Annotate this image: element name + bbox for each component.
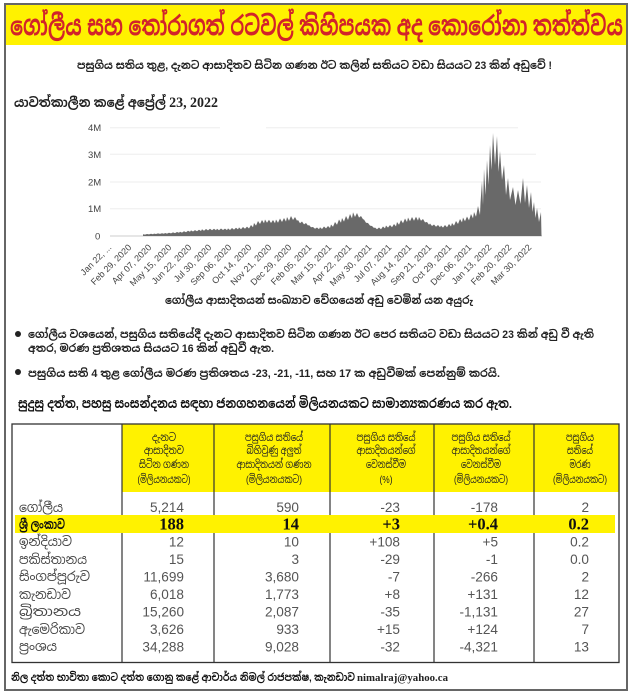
source credit: nimalraj@yahoo.ca: [357, 673, 449, 684]
daily case bars: [143, 133, 542, 236]
table numbers: +8: [384, 587, 400, 602]
x axis date labels: Oct 14, 2020: [210, 242, 253, 286]
table numbers: 0.2: [570, 534, 589, 550]
y axis labels: 2M: [88, 178, 101, 188]
table header: ආසාදිතව: [144, 445, 184, 457]
y axis labels: 1M: [88, 204, 101, 215]
table header: වෙනස්වීම: [366, 457, 406, 471]
table header: දැනට: [152, 432, 176, 444]
table header: (%): [380, 474, 392, 486]
table numbers: -35: [380, 604, 400, 620]
table numbers: 933: [276, 622, 299, 637]
table header: ආසාදිතයන්ගේ: [356, 443, 416, 457]
table numbers: -23: [380, 500, 400, 515]
highlight row: Sri Lanka: ශ්‍රී ලංකාව: [19, 517, 65, 533]
table numbers: 3,680: [265, 570, 299, 584]
table header: (මිලියනයකට): [138, 473, 190, 486]
table numbers: 15,260: [142, 604, 184, 620]
table header: (මිලියනයකට): [553, 473, 607, 486]
x axis date labels: [78, 242, 533, 288]
country names: කැනඩාව: [19, 587, 71, 602]
highlight row: Sri Lanka: 14: [282, 514, 299, 534]
x axis date labels: Dec 06, 2021: [428, 242, 473, 287]
country names: ඇමෙරිකාව: [19, 622, 85, 637]
x axis date labels: Feb 29, 2020: [89, 242, 133, 287]
highlight row: Sri Lanka: +3: [382, 514, 400, 534]
table numbers: -266: [471, 570, 498, 584]
x axis date labels: Jan 13, 2022: [450, 242, 493, 286]
table numbers: 590: [276, 500, 299, 515]
table numbers: 34,288: [142, 640, 184, 654]
table numbers: 13: [574, 640, 589, 654]
table header: වෙනස්වීම: [461, 457, 501, 471]
table header: මරණ: [570, 458, 591, 471]
table numbers: 3,626: [150, 622, 184, 637]
bullet points: අතර, මරණ ප්‍රතිශතය සියයට 16 කින් අඩුවී ඇත.: [28, 340, 274, 355]
table numbers: +108: [369, 534, 400, 550]
table numbers: -32: [380, 640, 400, 654]
table note: සුදුසු දත්ත, පහසු සංසන්දනය සඳහා ජනගහනයෙන් මිලියනයකට සාමාන්‍යකරණය කර ඇත.: [18, 395, 512, 412]
table header: ආසාදිතයන් ගණන: [236, 457, 312, 471]
x axis date labels: Sep 21, 2021: [388, 242, 433, 287]
x axis date labels: Dec 29, 2020: [248, 242, 293, 287]
x axis date labels: Jan 22, ...: [78, 242, 113, 277]
table numbers: [142, 500, 589, 654]
subtitle: පසුගිය සතිය තුළ, දැනට ආසාදිතව සිටින ගණන ඊට කලින් සතියට වඩා සියයට 23 කින් අඩුවේ !: [77, 57, 552, 72]
table numbers: 11,699: [143, 570, 184, 584]
table numbers: -4,321: [459, 640, 498, 654]
table numbers: 2: [581, 500, 589, 515]
x axis date labels: Oct 29, 2021: [410, 242, 453, 286]
highlight row: Sri Lanka: +0.4: [468, 514, 498, 534]
bullet points: ගෝලීය වශයෙන්, පසුගිය සතියේදී දැනට ආසාදිතව සිටින ගණන ඊට පෙර සතියට වඩා සියයට 23 කින් අඩු වී ඇති: [28, 326, 594, 341]
table numbers: -1: [486, 552, 498, 567]
table numbers: 6,018: [150, 587, 184, 602]
table numbers: 10: [284, 534, 299, 550]
table header: (මිලියනයකට): [246, 473, 302, 486]
y axis labels: 0: [95, 232, 100, 242]
table header: (මිලියනයකට): [454, 473, 508, 486]
bullet points: [15, 326, 594, 380]
table numbers: +124: [467, 622, 498, 637]
table header: ආසාදිතයන්ගේ: [452, 443, 511, 457]
table header: [122, 424, 619, 492]
table numbers: 2,087: [265, 604, 299, 620]
x axis date labels: Nov 21, 2020: [228, 242, 273, 287]
update date: යාවත්කාලීන කළේ අප්‍රේල් 23, 2022: [14, 94, 218, 111]
country names: ගෝලීය: [19, 499, 63, 515]
table numbers: 3: [291, 552, 299, 567]
x axis date labels: May 15, 2020: [128, 242, 173, 288]
country names: ප්‍රංශය: [19, 639, 57, 654]
table numbers: 2: [581, 570, 589, 584]
table numbers: 1,773: [265, 587, 299, 602]
table header: පසුගිය සතියේ: [452, 430, 511, 444]
table header: සිටින ගණන: [139, 458, 189, 471]
x axis date labels: Aug 14, 2021: [368, 242, 413, 287]
x axis date labels: Sep 06, 2020: [188, 242, 233, 287]
x axis date labels: Jul 07, 2021: [352, 242, 393, 284]
y axis labels: 3M: [88, 150, 101, 161]
highlight row: Sri Lanka: 188: [159, 514, 184, 534]
x axis date labels: Mar 30, 2022: [489, 242, 533, 287]
y axis labels: 4M: [88, 123, 101, 134]
table header: සතියේ: [567, 443, 593, 457]
source credit: නිල දත්ත භාවිතා කොට දත්ත ගොනු කළේ ආචාර්ය නිමල් රාජපක්ෂ, කැනඩාව: [11, 670, 355, 685]
table header: බිහිවුණු අලුත්: [246, 443, 302, 457]
x axis date labels: Apr 22, 2021: [310, 242, 353, 286]
table numbers: +5: [482, 534, 498, 550]
table numbers: 12: [169, 534, 184, 550]
highlight row: Sri Lanka: 0.2: [568, 514, 589, 534]
table numbers: 5,214: [150, 500, 184, 515]
x axis date labels: Feb 05, 2021: [269, 242, 313, 287]
country names: පකිස්තානය: [19, 551, 87, 567]
y axis labels: [88, 123, 101, 242]
bullet points: පසුගිය සති 4 තුළ ගෝලීය මරණ ප්‍රතිශතය -23, -21, -11, සහ 17 ක අඩුවීමක් පෙන්නුම් කරයි.: [28, 365, 500, 380]
country names: [19, 499, 90, 654]
table numbers: -7: [388, 570, 400, 584]
table numbers: 9,028: [265, 640, 299, 654]
table numbers: 15: [169, 552, 184, 567]
table numbers: -178: [471, 500, 498, 515]
table numbers: 27: [574, 604, 589, 620]
table numbers: 0.0: [570, 552, 589, 567]
data table: [12, 424, 619, 662]
table header: පසුගිය: [566, 432, 594, 444]
x axis date labels: Feb 20, 2022: [469, 242, 513, 287]
table numbers: 12: [574, 587, 589, 602]
table header: පසුගිය සතියේ: [245, 430, 303, 444]
table numbers: -29: [380, 552, 400, 567]
table numbers: 7: [581, 622, 589, 637]
x axis date labels: Jun 22, 2020: [150, 242, 193, 286]
table numbers: +15: [377, 622, 400, 637]
table numbers: -1,131: [459, 604, 498, 620]
country names: ඉන්දියාව: [19, 533, 72, 549]
x axis date labels: Jul 30, 2020: [172, 242, 213, 284]
table header: පසුගිය සතියේ: [356, 430, 416, 444]
chart caption: ගෝලීය ආසාදිතයන් සංඛ්‍යාව වේගයෙන් අඩු වෙමින් යන අයුරු: [165, 292, 473, 307]
table numbers: +131: [467, 587, 498, 602]
x axis date labels: Apr 07, 2020: [110, 242, 153, 286]
bar chart: global active cases: [78, 123, 542, 288]
x axis date labels: May 30, 2021: [328, 242, 373, 288]
x axis date labels: Mar 15, 2021: [289, 242, 333, 287]
highlight row: Sri Lanka: [15, 514, 615, 534]
country names: බ්‍රිතානය: [19, 603, 82, 619]
country names: සිංගප්පූරුව: [19, 568, 90, 584]
